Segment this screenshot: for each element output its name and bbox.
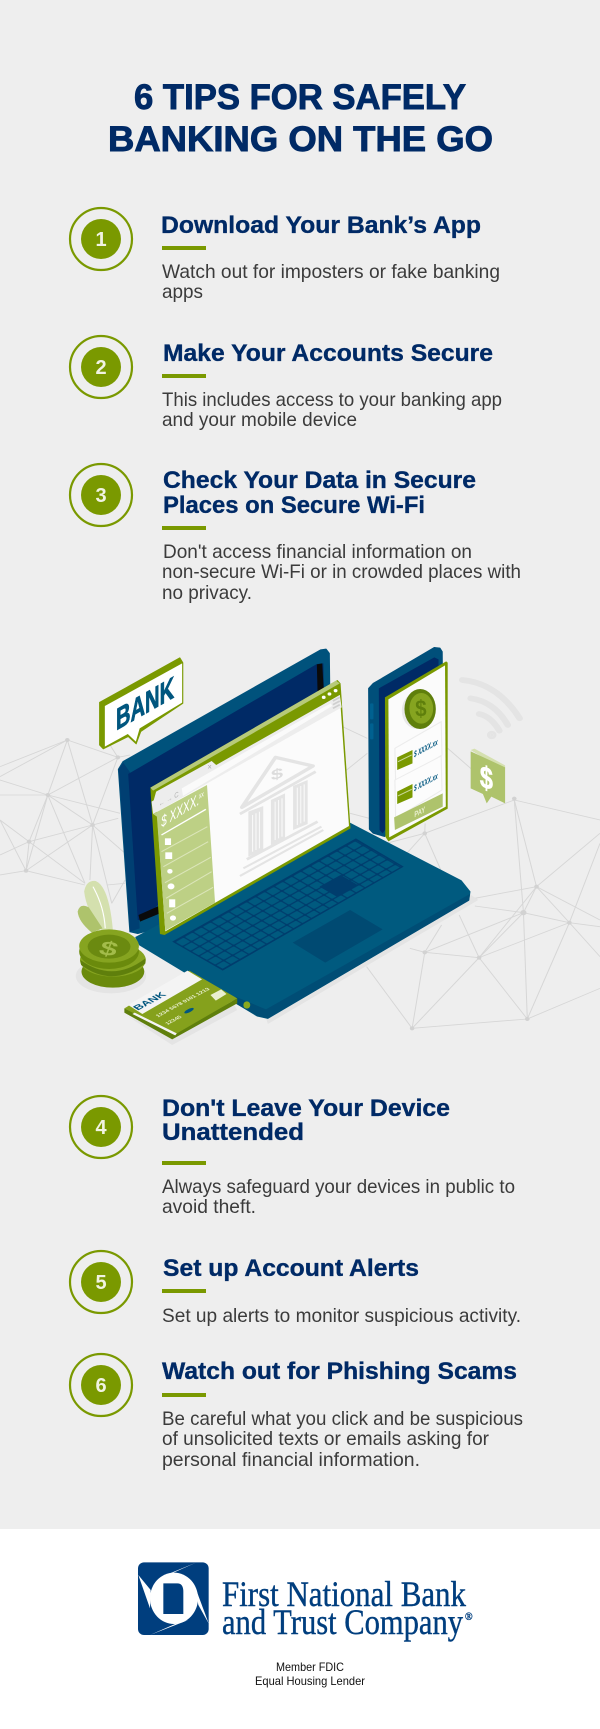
phone pay button: PAY — [414, 805, 426, 819]
icon: wifi signal — [462, 680, 520, 736]
tip 2: and your mobile device — [162, 409, 357, 431]
tip 6 — [70, 1354, 523, 1471]
laptop shadow — [264, 893, 478, 1024]
footer legal text: Equal Housing Lender — [255, 1674, 365, 1688]
sidebar amount: xx — [198, 789, 204, 801]
card edge — [124, 998, 237, 1039]
tab — [153, 761, 217, 803]
tip 3: non-secure Wi-Fi or in crowded places with — [162, 561, 521, 583]
top coin face — [79, 929, 139, 963]
led — [243, 1001, 250, 1009]
bank logo name: and Trust Company — [222, 1602, 463, 1642]
tip 1: apps — [162, 281, 203, 303]
lid left edge — [119, 763, 140, 932]
tip 2: Make Your Accounts Secure — [163, 340, 493, 367]
bottom coin — [82, 956, 144, 988]
leaf pale — [84, 881, 113, 930]
tip 3: 3 — [95, 485, 107, 507]
card bank name: BANK — [131, 991, 169, 1012]
phone white panel — [388, 665, 446, 837]
network nodes — [24, 738, 572, 1030]
bank dollar sign: $ — [271, 765, 283, 784]
bank building watermark — [240, 757, 323, 876]
sidebar main line — [161, 809, 206, 835]
tip 1: Watch out for imposters or fake banking — [162, 261, 500, 283]
window green border — [150, 680, 351, 935]
middle coin edge — [80, 958, 145, 976]
screen black edge bottom — [139, 906, 160, 922]
credit card — [124, 971, 237, 1045]
nav arrows: ← → C — [159, 789, 179, 808]
laptop lid — [119, 649, 335, 933]
sidebar — [153, 785, 215, 931]
bank logo name: ® — [465, 1612, 473, 1623]
phone account card 2: $ XXXX.xx — [414, 772, 438, 794]
tip 4: Always safeguard your devices in public to — [162, 1176, 515, 1198]
phone pay button — [394, 793, 443, 830]
tip 4 — [70, 1095, 515, 1218]
tip 2: This includes access to your banking app — [162, 389, 502, 411]
phone side buttons — [370, 703, 373, 739]
network background lines — [0, 727, 600, 1028]
footer legal text — [255, 1660, 365, 1688]
tip 3: Places on Secure Wi-Fi — [163, 492, 425, 519]
footer legal text: Member FDIC — [276, 1660, 344, 1674]
tip 4: avoid theft. — [162, 1196, 256, 1218]
card shadow — [128, 1003, 237, 1045]
title: 6 TIPS FOR SAFELY — [134, 78, 466, 117]
phone screen — [379, 657, 439, 833]
middle coin — [80, 943, 146, 977]
lid screen — [128, 663, 325, 920]
bank logo mark — [138, 1562, 209, 1635]
phone — [368, 647, 448, 841]
title: BANKING ON THE GO — [108, 120, 493, 159]
icon: dollar tag — [471, 749, 505, 803]
top coin centre — [88, 935, 130, 959]
coins and leaves — [76, 881, 146, 993]
coin dollar sign: $ — [96, 937, 122, 961]
icon: dollar tag: $ — [480, 759, 493, 798]
leaf pale vein — [93, 887, 105, 928]
phone back — [368, 647, 443, 837]
bank logo name — [222, 1574, 473, 1642]
screen black edge top — [317, 663, 324, 693]
phone account card 2 — [395, 756, 442, 818]
base front side — [235, 894, 470, 1019]
keyboard — [172, 838, 404, 971]
keys — [174, 840, 401, 969]
window menu icon — [333, 697, 340, 708]
laptop base — [136, 823, 470, 1018]
top coin side — [79, 934, 139, 969]
bank logo name: First National Bank — [222, 1574, 466, 1614]
coin shadow — [76, 959, 146, 993]
card white band — [128, 971, 202, 1014]
tip 5: 5 — [95, 1272, 107, 1294]
bubble front — [105, 663, 182, 747]
phone coin — [402, 689, 436, 729]
tip 5: Set up alerts to monitor suspicious activity. — [162, 1305, 521, 1327]
tip 5 — [70, 1251, 521, 1327]
window dots — [322, 689, 337, 699]
card detail: 12345 — [165, 1015, 184, 1026]
tip 6: 6 — [95, 1375, 107, 1397]
laptop — [119, 649, 478, 1024]
sidebar icons — [165, 838, 176, 921]
tip 2: 2 — [95, 357, 107, 379]
speech bubble: BANK — [99, 658, 183, 749]
card chip — [210, 989, 227, 1001]
phone front panel — [385, 661, 448, 841]
tip 6: Be careful what you click and be suspicious — [162, 1408, 523, 1430]
tab close icon: x — [208, 763, 212, 770]
url field — [182, 703, 332, 796]
card mark — [183, 1007, 195, 1014]
tip 3: Don't access financial information on — [163, 541, 472, 563]
footer background — [0, 1529, 600, 1729]
phone coin: $ — [415, 697, 427, 722]
tip 2 — [70, 336, 502, 431]
tip 6: of unsolicited texts or emails asking for — [162, 1428, 489, 1450]
tip 3 — [70, 464, 521, 604]
tip 4: Unattended — [162, 1119, 304, 1146]
sidebar amount: $ XXXX. — [161, 773, 228, 831]
tip 6: personal financial information. — [162, 1449, 420, 1471]
card green face — [124, 971, 237, 1035]
card number: 1234 5678 9101 1213 — [155, 987, 212, 1018]
bubble text: BANK — [116, 669, 174, 737]
phone account card 1: $ XXXX.xx — [414, 738, 438, 760]
tip 1: 1 — [95, 229, 107, 251]
window top highlight — [150, 681, 340, 791]
tip 3: no privacy. — [162, 582, 252, 604]
sidebar lines — [161, 827, 213, 913]
tip 4: Don't Leave Your Device — [162, 1095, 450, 1122]
leaf green — [78, 906, 103, 933]
tip 1: Download Your Bank’s App — [161, 212, 481, 239]
title — [108, 78, 493, 159]
bubble side — [99, 658, 183, 749]
touchpad — [293, 910, 383, 963]
tip 3: Check Your Data in Secure — [163, 467, 476, 494]
tip 4: 4 — [95, 1117, 107, 1139]
tip 1 — [70, 208, 500, 303]
tip 5: Set up Account Alerts — [163, 1255, 419, 1282]
phone account card 1 — [395, 722, 442, 783]
address bar — [152, 695, 342, 814]
card white stripe — [132, 1013, 177, 1035]
tip 6: Watch out for Phishing Scams — [162, 1358, 517, 1385]
illustration: laptop banking scene — [0, 647, 600, 1045]
window page — [156, 695, 349, 931]
dark key cluster — [320, 875, 358, 897]
browser window — [150, 680, 351, 935]
